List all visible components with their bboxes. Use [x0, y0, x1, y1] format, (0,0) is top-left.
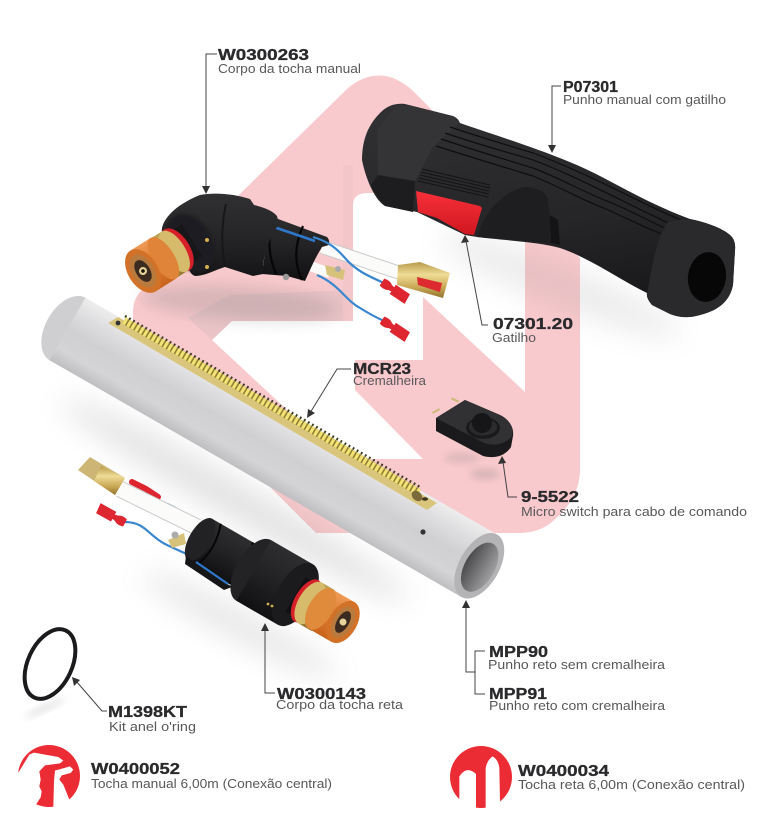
callout: W0300263 [202, 47, 361, 194]
white tubes [322, 247, 400, 273]
red connector front [95, 503, 128, 528]
leader arrow [202, 54, 217, 194]
legend: W0400034: W0400034 [518, 763, 609, 780]
torch body: W0300263 [118, 194, 450, 342]
legend: W0400034 [518, 763, 745, 792]
callout: MCR23: Cremalheira [353, 373, 427, 388]
red connector 2 [379, 315, 411, 342]
vent [418, 169, 490, 197]
callout: M1398KT: M1398KT [108, 704, 187, 721]
callout: W0300263: W0300263 [218, 47, 309, 64]
callout: W0300143: Corpo da tocha reta [276, 697, 404, 712]
callout: M1398KT [72, 677, 196, 734]
micro switch: 9-5522 [432, 397, 513, 457]
blue wire 1 [313, 237, 384, 283]
ridges [436, 127, 693, 238]
nozzle [118, 220, 205, 299]
icon: straight torch [450, 746, 513, 811]
leader arrow [72, 677, 107, 711]
legend: W0400034: Tocha reta 6,00m (Conexão central) [518, 777, 745, 792]
finger recess [477, 187, 553, 243]
rear black [262, 216, 329, 281]
blue wires [162, 502, 197, 522]
callout: MCR23 [307, 361, 427, 418]
leader arrow [261, 623, 275, 693]
brass fitting [78, 457, 125, 495]
tube: punho reto [30, 287, 515, 607]
elbow [162, 194, 279, 276]
callout: W0300143 [261, 623, 404, 712]
rack: cremalheira [108, 316, 437, 510]
end collar [647, 219, 735, 317]
callout: MPP90 and MPP91: MPP91 [489, 686, 547, 703]
callout: 9-5522: 9-5522 [521, 489, 579, 506]
legend: W0400052 [91, 761, 332, 791]
side clip [185, 556, 232, 590]
leader arrow [498, 456, 517, 497]
leader arrow [307, 369, 351, 418]
callout: 07301.20: Gatilho [492, 330, 536, 345]
object shadows [24, 218, 688, 720]
callout: 9-5522: Micro switch para cabo de comando [521, 504, 747, 519]
callout: MCR23: MCR23 [353, 361, 411, 378]
callout: 9-5522 [498, 456, 747, 519]
leader arrow [462, 600, 485, 694]
screw clamp [168, 533, 186, 548]
icon: manual torch [15, 745, 82, 812]
callout: 07301.20: 07301.20 [493, 316, 573, 333]
legend: W0400052: Tocha manual 6,00m (Conexão central) [91, 776, 332, 791]
tube hole [420, 529, 426, 535]
callout: P07301 [548, 79, 726, 153]
red connector rear [132, 482, 158, 497]
leader arrow [461, 235, 488, 325]
torch body: W0300143 [78, 457, 373, 659]
callout: P07301: P07301 [563, 79, 618, 96]
red connector 1 [379, 277, 411, 304]
white tube [120, 489, 197, 527]
legend: W0400052: W0400052 [91, 761, 180, 778]
callout: P07301: Punho manual com gatilho [563, 92, 726, 107]
brass fitting [397, 262, 450, 298]
cap facets [377, 105, 459, 181]
callout: M1398KT: Kit anel o'ring [109, 719, 196, 734]
callout: MPP90 and MPP91: MPP90 [489, 644, 548, 661]
background logo [133, 75, 580, 533]
callout: W0300143: W0300143 [277, 686, 366, 703]
trigger: 07301.20 [416, 191, 482, 235]
cylinders [173, 504, 373, 659]
screw clamp [325, 265, 345, 280]
o-ring: M1398KT [14, 621, 86, 707]
handle: P07301 [362, 104, 735, 317]
leader arrow [548, 86, 561, 153]
callout: 07301.20 [461, 235, 573, 345]
callout: MPP90 and MPP91 [462, 600, 666, 713]
callout: MPP90 and MPP91: Punho reto sem cremalheira [488, 657, 666, 672]
blue wire 2 [317, 275, 384, 321]
callout: MPP90 and MPP91: Punho reto com cremalheira [489, 698, 666, 713]
callout: W0300263: Corpo da tocha manual [218, 61, 361, 76]
